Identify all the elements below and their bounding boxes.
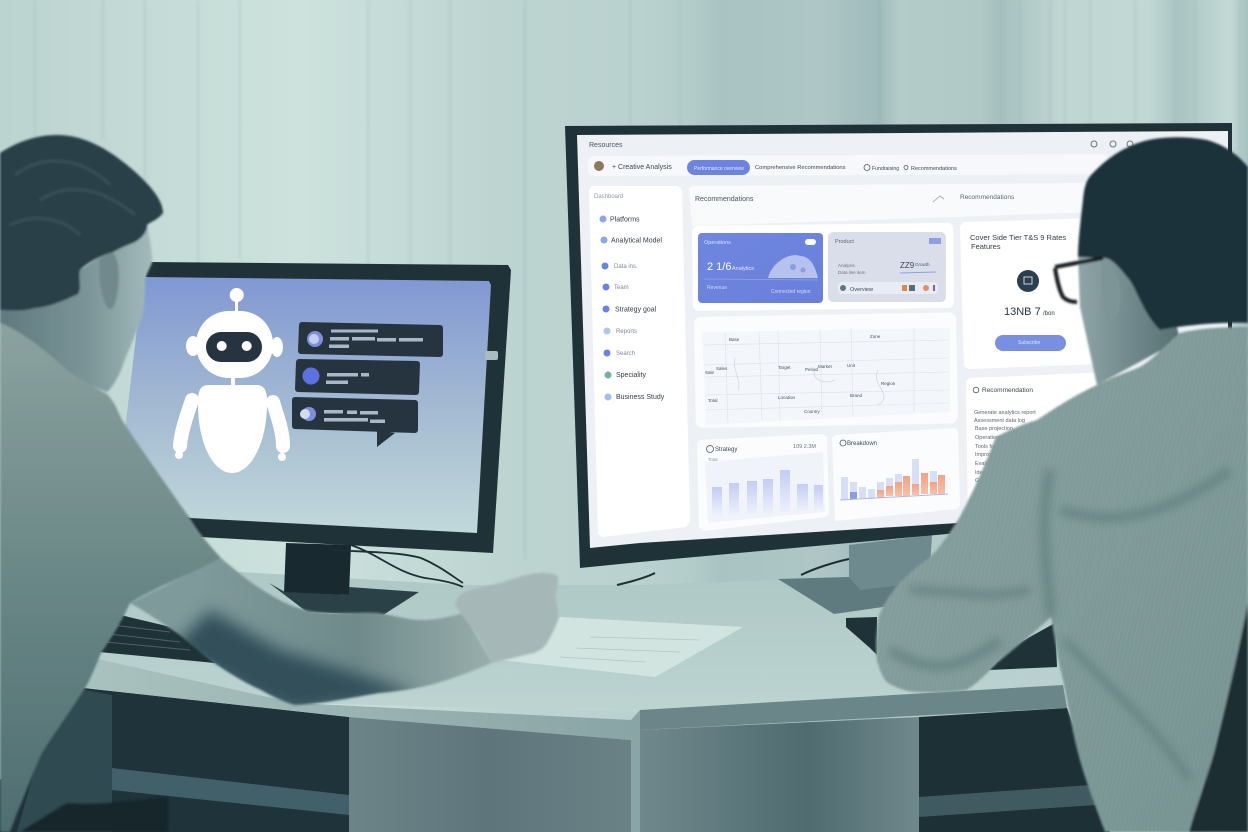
map chart panel: Country — [804, 409, 821, 414]
nav bar: + Creative Analysis — [612, 164, 672, 171]
summary panel: 13NB 7 — [1004, 306, 1041, 318]
robot visor — [206, 332, 262, 362]
header panel: Recommendations — [695, 196, 754, 203]
metric cards wrapper — [692, 223, 954, 311]
summary panel: /bon — [1043, 311, 1055, 317]
desk: under-desk cavity left — [0, 688, 349, 832]
robot ears — [186, 336, 283, 357]
header panel: Recommendations — [960, 194, 1015, 201]
header panel — [689, 183, 1095, 226]
summary button — [995, 335, 1066, 351]
map chart panel: Target — [778, 365, 791, 370]
forearm — [130, 557, 492, 706]
desk: cavity side wall — [17, 690, 112, 832]
map chart panel: Total — [708, 398, 718, 403]
sidebar panel: Dashboard — [594, 194, 623, 200]
sidebar panel: Strategy goal — [615, 306, 657, 314]
sidebar panel: Reports — [616, 329, 637, 335]
desk: right front edge — [640, 685, 1067, 730]
text notes panel: Base projection — [975, 426, 1013, 432]
map chart panel: Brand — [850, 393, 863, 398]
text notes panel: Improve — [975, 452, 995, 458]
blue metric card: 2 1/6 — [707, 261, 731, 273]
webcam tab — [485, 351, 498, 360]
map chart panel: Sale — [705, 370, 715, 375]
map chart panel: Zone — [870, 334, 881, 339]
chat bubble 3 with tail — [295, 400, 415, 447]
desk: top surface — [93, 570, 1063, 712]
shirt — [870, 320, 1248, 832]
desk: cavity shelf right — [919, 785, 1096, 817]
text notes panel: Generate analytics report — [974, 410, 1036, 416]
blue metric card: Revenue — [707, 285, 727, 291]
summary panel: Cover Side Tier T&S 9 Rates — [970, 233, 1066, 242]
grey metric card: Product — [835, 239, 854, 245]
left keyboard — [99, 613, 215, 663]
screen — [577, 131, 1228, 548]
sidebar panel — [589, 186, 690, 537]
desk: corner seam — [631, 710, 640, 832]
ear — [1101, 265, 1120, 323]
bottom-left bar chart panel — [697, 434, 829, 531]
sidebar panel: Data ins. — [614, 264, 638, 270]
analytics dashboard — [588, 141, 1133, 537]
sidebar panel: Analytical Model — [611, 238, 662, 244]
shirt body — [0, 323, 221, 832]
bezel — [565, 123, 1232, 568]
desk: left front panel — [349, 717, 631, 832]
hair — [1078, 137, 1248, 330]
grey metric card: Growth — [915, 262, 930, 267]
robot arms — [180, 400, 283, 446]
bezel — [120, 262, 511, 553]
desk: cavity shelf left — [112, 768, 349, 815]
map chart panel — [694, 312, 958, 428]
bottom-right bar chart panel: Breakdown — [847, 441, 877, 447]
blue metric card: Operations — [704, 240, 731, 246]
active nav pill — [687, 160, 750, 175]
sidebar panel: Search — [616, 351, 635, 357]
shirt folds — [890, 470, 1230, 780]
sidebar panel: Business Study — [616, 394, 665, 401]
summary panel: Features — [971, 242, 1001, 251]
summary panel — [960, 218, 1100, 369]
text notes panel: Ideas — [975, 470, 989, 476]
nav bar: Recommendations — [911, 166, 957, 172]
text notes panel: Goals — [975, 478, 990, 484]
right monitor — [565, 123, 1232, 614]
right keyboard — [846, 617, 1057, 670]
glasses — [1055, 258, 1103, 302]
chat bubble 1 — [301, 325, 440, 354]
chair — [1189, 603, 1248, 832]
chat bubbles — [295, 325, 440, 447]
map chart panel: Sales — [716, 366, 728, 371]
sidebar panel: Platforms — [610, 216, 640, 224]
elbow shadow — [170, 610, 420, 712]
person right — [870, 137, 1248, 832]
map chart panel: Unit — [847, 363, 856, 368]
ear — [99, 252, 119, 309]
stand — [849, 535, 932, 592]
desk: under-desk cavity right — [919, 708, 1110, 832]
screen — [118, 277, 491, 533]
text notes panel: Operations — [975, 435, 1002, 441]
text notes panel: Assessment data log — [974, 418, 1025, 424]
bottom-left bar chart panel: Strategy — [715, 447, 737, 453]
blue metric card: Connected region — [771, 289, 811, 295]
bottom-left bar chart panel: 109 2.3M — [793, 444, 816, 450]
desk: left front edge — [84, 658, 631, 740]
grey metric card: Data line item — [838, 270, 866, 275]
neck and face — [0, 225, 152, 392]
map chart panel: Market — [818, 364, 833, 369]
desk — [0, 570, 1110, 832]
sidebar panel: Speciality — [616, 372, 646, 379]
map chart panel: Period — [805, 367, 819, 372]
robot body — [198, 385, 267, 473]
map chart panel: Location — [778, 395, 796, 400]
robot head — [196, 311, 273, 378]
active nav pill: Performance overview — [694, 166, 744, 172]
bottom-left bar chart panel: Total — [708, 457, 718, 462]
person left — [0, 135, 558, 832]
bottom-right bar chart panel — [832, 428, 960, 521]
summary icon — [1017, 270, 1039, 292]
chair — [20, 797, 168, 832]
summary button: Subscribe — [1018, 340, 1040, 346]
text notes panel: Recommendation — [982, 387, 1033, 394]
grey metric card: Analysis — [838, 263, 856, 268]
left monitor — [118, 262, 511, 615]
nav bar — [588, 154, 1108, 176]
hair — [0, 135, 163, 310]
dashboard title bar — [589, 141, 1133, 149]
desk: right front panel — [640, 717, 919, 832]
grey metric card: Overview — [850, 287, 873, 293]
nav bar: Comprehensive Recommendations — [755, 165, 846, 171]
sidebar panel: Team — [614, 285, 629, 291]
hand — [455, 573, 558, 663]
text notes panel: Evaluate — [975, 461, 996, 467]
text notes panel: Tools for — [975, 444, 996, 450]
grey metric card — [828, 232, 946, 302]
map chart panel: Region — [881, 381, 896, 386]
text notes panel — [966, 372, 1110, 520]
blue metric card: Analytics — [732, 266, 754, 272]
map chart panel: Base — [729, 337, 740, 342]
face and neck — [1078, 255, 1180, 385]
chat bubble 2 — [298, 362, 417, 392]
robot illustration — [175, 288, 286, 473]
stand — [284, 543, 351, 595]
dashboard title bar: Resources — [589, 142, 623, 149]
robot hands — [175, 451, 286, 461]
blue metric card — [698, 233, 823, 303]
paper on desk — [500, 617, 743, 677]
grey metric card: ZZ9 — [900, 261, 915, 270]
nav bar: Fundraising — [872, 166, 899, 172]
robot neck — [231, 377, 235, 386]
robot antenna — [230, 288, 244, 312]
